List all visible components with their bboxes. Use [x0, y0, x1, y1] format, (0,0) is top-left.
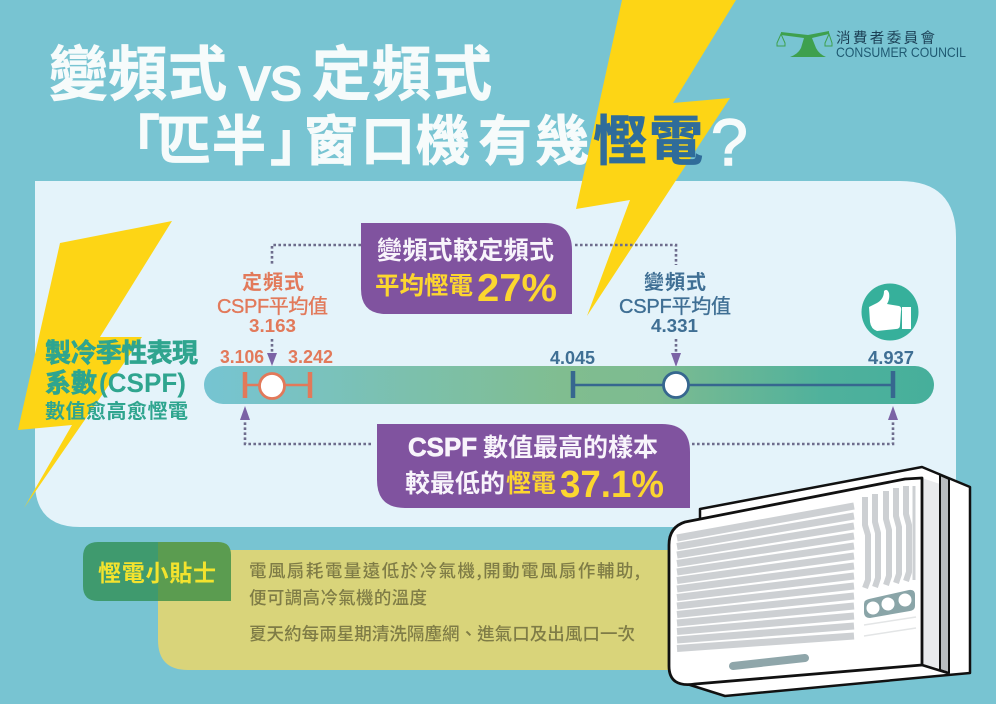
- title line 1: 定頻式: [312, 27, 492, 112]
- heading: CSPF explanation: 數值愈高愈慳電: [45, 395, 188, 424]
- heading: CSPF explanation: 系數: [45, 363, 97, 400]
- heading: CSPF explanation: 製冷季性表現: [45, 333, 198, 370]
- inverter label: 4.937: [868, 348, 914, 368]
- icon: window air conditioner: [669, 467, 970, 696]
- fixed-speed label: 3.163: [249, 316, 296, 336]
- title line 1: 變頻式: [49, 27, 227, 112]
- tips tab: 慳電小貼士: [98, 554, 216, 588]
- callout: highest vs lowest: 數值最高的樣本: [483, 428, 658, 464]
- side panels: [922, 478, 940, 668]
- title: [49, 27, 748, 179]
- title line 2: ?: [711, 105, 748, 179]
- fixed-speed label: CSPF平均值: [217, 295, 328, 318]
- inverter label: CSPF平均值: [619, 295, 731, 318]
- tips text: 電風扇耗電量遠低於冷氣機,開動電風扇作輔助,: [249, 558, 640, 583]
- panel: energy saving tips: [83, 542, 700, 670]
- icon: scales: [777, 31, 832, 57]
- title line 2: [106, 97, 748, 179]
- callout: highest vs lowest: 37.1%: [560, 464, 664, 506]
- fixed-speed label: 3.106: [220, 347, 264, 367]
- inverter range marker: [573, 371, 893, 398]
- panel lines: [864, 617, 916, 636]
- fixed-speed range marker: [245, 372, 310, 398]
- inverter label: 4.045: [550, 348, 595, 368]
- icon: left lightning bolt: [18, 221, 172, 508]
- vent slats: [865, 486, 914, 588]
- tips tab: [83, 542, 231, 601]
- heading: CSPF explanation: [45, 333, 198, 424]
- callout: highest vs lowest: CSPF: [408, 432, 477, 462]
- callout: average saving: 平均慳電: [375, 267, 473, 302]
- callout: highest vs lowest: 較最低的: [405, 464, 505, 500]
- callout: average saving: 變頻式較定頻式: [377, 231, 554, 267]
- logo chinese name: 消費者委員會: [836, 27, 936, 48]
- tips text: 夏天約每兩星期清洗隔塵網、進氣口及出風口一次: [249, 621, 635, 646]
- inverter label: [550, 266, 914, 368]
- logo english name: CONSUMER COUNCIL: [836, 44, 966, 60]
- front face: [669, 478, 922, 685]
- tips text: [249, 558, 640, 646]
- main panel: [35, 181, 956, 527]
- icon: top lightning bolt: [576, 0, 736, 316]
- arrowheads: [240, 353, 898, 420]
- callout: average saving: [361, 223, 572, 314]
- callout: highest vs lowest: 慳電: [506, 464, 556, 500]
- fixed-speed label: [217, 266, 333, 367]
- title line 1: [49, 27, 492, 114]
- CSPF bar: [204, 366, 934, 404]
- title line 2: 「匹半」: [106, 97, 324, 176]
- fixed-speed label: 3.242: [288, 347, 333, 367]
- inverter label: 4.331: [651, 316, 698, 336]
- heading: CSPF explanation: (CSPF): [99, 368, 186, 398]
- side bottom edge: [922, 665, 948, 673]
- callout: highest vs lowest: [377, 424, 690, 508]
- dotted connectors top: [245, 245, 893, 444]
- title line 2: 窗口機有幾: [304, 97, 589, 176]
- grill stripes: [677, 506, 854, 648]
- tips text: 便可調高冷氣機的溫度: [249, 585, 427, 610]
- handle: [733, 658, 805, 666]
- tips background: [158, 550, 700, 670]
- inverter label: 變頻式: [644, 266, 706, 295]
- logo: Consumer Council: [777, 27, 966, 60]
- unit rear body: [687, 467, 970, 696]
- title line 2: 慳電: [593, 97, 703, 176]
- callout: average saving: 27%: [477, 267, 557, 310]
- fixed-speed label: 定頻式: [242, 266, 304, 295]
- title line 1: vs: [239, 45, 302, 114]
- control panel: [864, 590, 915, 618]
- icon: thumbs up: [862, 284, 918, 340]
